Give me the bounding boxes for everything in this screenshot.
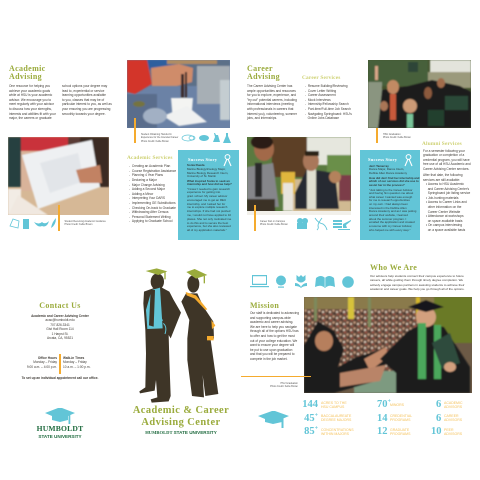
stat: 45+ majors: 45+ xyxy=(304,412,318,424)
text: career advising intro: The Career Advising Center has xyxy=(247,84,292,88)
list: alumni services: on a space available basis xyxy=(428,228,465,232)
list: career services: - Part-time/Full-time Job Search xyxy=(305,107,351,111)
text: office hours: 9:00 a.m. – 4:00 p.m. xyxy=(27,365,57,369)
text: quote: "Just talking to the Career Advisor xyxy=(369,188,412,192)
text: walk-in times xyxy=(63,356,90,369)
list: career services: - Mock Interviews xyxy=(305,98,331,102)
caption: lab photo: Photo Credit: Kellie Brown xyxy=(141,140,169,143)
text: quote: for me to research opportunities xyxy=(369,198,410,202)
stat: 144 acres xyxy=(298,399,348,412)
caption: lab photo: Student Obtaining Hands-On xyxy=(141,133,172,136)
stat: 85+ concentrations xyxy=(298,426,364,439)
text: alumni services intro: free use of all HSU Academic and xyxy=(423,162,471,166)
illustration: two graduates xyxy=(139,268,218,403)
stat: 6 academic advisors xyxy=(430,399,470,412)
stat: 6 career advisors xyxy=(430,412,470,425)
icon: ribbon xyxy=(404,154,412,166)
title: Academic & Career Advising Center: Advising Center xyxy=(141,417,221,428)
caption: graduation photo xyxy=(383,133,411,139)
text: question: assist her in the process? xyxy=(369,183,405,187)
list: academic services: - Major Change Advising xyxy=(129,183,165,187)
text: who we are description xyxy=(370,274,465,291)
text: student name and major: Jerri Tamerray xyxy=(369,164,389,168)
caption: mission photo: HSU Graduation xyxy=(280,382,298,385)
text: appointment note: To set up an individual appointment call our office. xyxy=(22,376,98,380)
text: quote: places. She not only motivated me xyxy=(187,217,231,221)
text: academic advising intro column 1 xyxy=(9,84,56,120)
text: quote: emailed the application and created xyxy=(369,220,415,224)
text: academic advising intro column 1: interests and abilities fit with your xyxy=(9,112,56,116)
text: mission statement: and supporting campus-wide xyxy=(250,316,291,320)
icons: academic items xyxy=(10,218,56,229)
stat: 10 peer advisors: ADVISORS xyxy=(444,432,462,436)
list: alumni services: Springboard job listing service xyxy=(428,191,470,195)
stat: 10 peer advisors: PEER xyxy=(444,428,454,432)
caption: career fair photo: Photo Credit: Kellie Brown xyxy=(260,223,288,226)
text: question: How did Jerri find her internship and xyxy=(369,176,419,180)
stat: 45+ majors: DEGREE MAJORS xyxy=(321,418,351,422)
text: contact details xyxy=(31,314,89,340)
text: career advising intro: with professionals in careers that xyxy=(247,107,293,111)
list: academic services: - Planning 4 Year Plans xyxy=(129,173,163,177)
heading: Academic Services: Academic Services xyxy=(127,154,173,160)
logo: Humboldt State University xyxy=(36,408,84,438)
stat: 45+ majors: BACCALAUREATE xyxy=(321,414,351,418)
caption: guidance photo: Photo Credit: Kellie Brown xyxy=(64,223,92,226)
list: academic services: - Declaring a Major xyxy=(129,178,157,182)
heading: Alumni Services: Alumni Services xyxy=(422,140,462,146)
heading: Career Advising: Advising xyxy=(247,72,280,81)
text: academic advising intro column 2 xyxy=(62,84,112,116)
man silhouette xyxy=(139,268,181,403)
stat: 6 career advisors: CAREER xyxy=(444,414,459,418)
stat: 85+ concentrations: 85+ xyxy=(304,426,318,437)
text: quote: interested in the Debbie Allen xyxy=(369,206,407,210)
text: who we are description: Our advisors help students connect their campus experience to future xyxy=(370,274,464,278)
text: alumni services intro: services are still available: xyxy=(423,178,460,182)
heading: Academic Advising: Academic xyxy=(9,64,46,72)
text: career advising intro: "try out" potential careers, including xyxy=(247,98,297,102)
stat: 6 academic advisors: 6 xyxy=(436,399,441,410)
text: who we are description: actively engage campus partners in assisting students to achieve their xyxy=(370,283,465,287)
list: career services: - Resume Building/Reviewing xyxy=(305,84,348,88)
list: alumni services: Career Center Website xyxy=(428,210,460,214)
list: academic services xyxy=(129,164,176,223)
text: quote: what career I wanted was enough xyxy=(369,195,412,199)
text: student name and major xyxy=(187,163,228,178)
icons: science xyxy=(182,133,231,143)
stat: 144 acres: HSU CAMPUS xyxy=(321,405,344,409)
text: question: internship and how did we help? xyxy=(187,182,232,186)
text: contact details: acac@humboldt.edu xyxy=(45,318,75,322)
stat: 144 acres: 144 xyxy=(302,399,318,410)
text: student name and major: Marine Biology Research Intern, xyxy=(187,171,228,175)
stat: 70+ minors: MINORS xyxy=(390,402,404,406)
panel: success story career xyxy=(360,150,420,240)
icons: campus items xyxy=(250,275,354,288)
text: academic advising intro column 2: school options your degree may xyxy=(62,84,107,88)
text: mission statement xyxy=(250,311,299,361)
caption: mission photo xyxy=(258,382,298,389)
heading: Academic Advising: Advising xyxy=(9,72,42,81)
list: alumni services xyxy=(426,182,470,232)
icon: graduation cap xyxy=(258,411,289,428)
text: contact details: 1 Harpst St. xyxy=(52,332,68,336)
text: quote: me, I would not have applied to 10 xyxy=(187,213,231,217)
text: quote xyxy=(187,186,232,232)
caption: lab photo: Experience for the Intended Career xyxy=(141,136,178,139)
text: mission statement: We are here to help you navigate xyxy=(250,325,297,329)
text: quote: to do this and to secure the best xyxy=(187,221,228,225)
heading: success story: Success Story xyxy=(368,157,397,162)
stat: 14 credential programs: CREDENTIAL xyxy=(390,414,412,418)
stat: 10 peer advisors: 10 xyxy=(431,426,442,437)
caption: graduation photo: Photo Credit: Kellie Brown xyxy=(383,136,411,139)
text: quote: all of my application materials." xyxy=(187,228,227,232)
text: quote: who helped me with every step." xyxy=(369,228,411,232)
stat: 6 academic advisors: ADVISORS xyxy=(444,405,462,409)
list: alumni services: • Access to Career Links and xyxy=(426,200,467,204)
text: mission statement: through all of the options HSU has xyxy=(250,329,299,333)
list: alumni services: • On campus interviewing xyxy=(426,223,462,227)
text: quote: encouraged me to get an REU xyxy=(187,198,226,202)
text: who we are description: academic and career goals. We help you go through all of the options. xyxy=(370,287,464,291)
text: alumni services intro: For a semester following your xyxy=(423,148,465,152)
text: Humboldt State University line: HUMBOLDT STATE UNIVERSITY xyxy=(145,430,217,435)
heading: Career Advising: Career xyxy=(247,64,273,72)
orange bar: mission photo xyxy=(241,376,311,377)
text: academic advising intro column 2: your ensuring you are progressing xyxy=(62,107,110,111)
text: quote: a resume with my Career Advisor, xyxy=(369,224,412,228)
list: academic services: - Course Registration Assistance xyxy=(129,169,176,173)
panel: success story academic xyxy=(178,150,239,240)
text: quote: on my own. I had always been xyxy=(369,202,408,206)
text: student name and major: Marine Biology/Zoology Major, xyxy=(187,167,226,171)
stat: 10 peer advisors xyxy=(430,426,470,439)
list: alumni services: and Career Advising Center's xyxy=(428,187,469,191)
text: quote: Dance Academy and as I was poking xyxy=(369,209,416,213)
text: academic advising intro column 1: meet regularly with your advisor xyxy=(9,102,54,106)
text: quote: experience for getting into xyxy=(187,190,220,194)
text: quote: me to explore multiple research xyxy=(187,205,227,209)
text: academic advising intro column 1: major, the careers or graduate xyxy=(9,116,52,120)
stat: 85+ concentrations: CONCENTRATIONS xyxy=(321,428,354,432)
text: career advising intro: jobs, and internships. xyxy=(247,116,277,120)
text: walk-in times: Monday – Friday xyxy=(63,360,87,364)
list: academic services: - Interpreting Your DARS xyxy=(129,196,165,200)
text: mission statement: academic and career advising. xyxy=(250,320,293,324)
text: academic advising intro column 2: lead to, experiential or service xyxy=(62,89,104,93)
caption: lab photo xyxy=(141,133,178,143)
list: career services xyxy=(305,84,352,120)
text: academic advising intro column 1: while at HSU is your academic xyxy=(9,93,52,97)
stat: 70+ minors: 70+ xyxy=(377,398,391,410)
text: student name and major xyxy=(369,164,407,175)
text: walk-in times: 10 a.m. – 1:00 p.m. xyxy=(63,365,90,369)
list: career services: Online Jobs Database xyxy=(308,116,339,120)
text: alumni services intro: Career Advising Center services. xyxy=(423,167,469,171)
stat: 45+ majors xyxy=(298,412,358,425)
list: alumni services: on space available basis xyxy=(428,219,463,223)
caption: guidance photo xyxy=(64,220,106,226)
heading: Career Services: Career Services xyxy=(302,75,341,81)
text: academic advising intro column 1: advisor. We encourage you to xyxy=(9,98,51,102)
text: career advising intro: interest you), volunteering, summer xyxy=(247,112,297,116)
stat: 70+ minors xyxy=(376,399,416,412)
orange bar: graduation photo xyxy=(376,128,378,143)
text: student name and major: Sonia Rueda xyxy=(187,163,205,167)
text: quote: and having him question me about xyxy=(369,191,413,195)
text: quote: internships. If she had not pushed xyxy=(187,209,230,213)
text: career advising intro: for you to explore, experience, and xyxy=(247,93,296,97)
text: question xyxy=(187,178,232,186)
icons: career items xyxy=(297,218,351,230)
text: office hours: Office Hours xyxy=(38,356,57,360)
text: academic advising intro column 2: to you, classes that may be of xyxy=(62,98,104,102)
text: who we are description: careers, all while guiding them through timely degree completion. We xyxy=(370,278,463,282)
text: academic advising intro column 1: to discuss how your strengths, xyxy=(9,107,52,111)
text: academic advising intro column 2: learning opportunities available xyxy=(62,93,106,97)
stat: 6 academic advisors: ACADEMIC xyxy=(444,400,462,404)
heading: Academic Advising xyxy=(9,64,46,81)
caption: mission photo: Photo Credit: Kellie Brown xyxy=(270,385,298,388)
heading: success story: Success Story xyxy=(188,157,217,162)
stat: 14 credential programs: 14 xyxy=(377,413,388,424)
text: Humboldt wordmark: HUMBOLDT xyxy=(37,424,83,433)
text: student name and major: University of St. Martin xyxy=(187,174,216,178)
icon: ribbon xyxy=(224,154,232,166)
list: academic services: - Withdrawing After Census xyxy=(129,210,169,214)
caption: guidance photo: Student Receiving Academic Guidance xyxy=(64,220,106,223)
title: Academic & Career Advising Center: Academic & Career xyxy=(133,405,229,416)
text: quote xyxy=(369,188,416,232)
stat: 12 graduate programs xyxy=(376,426,416,439)
text: academic advising intro column 1: One resource for helping you xyxy=(9,84,50,88)
text: quote: "I knew I needed to gain research xyxy=(187,186,230,190)
title: Academic & Career Advising Center xyxy=(133,405,229,428)
stat: 144 acres: ACRES TO THE xyxy=(321,400,347,404)
text: office hours: Monday – Friday xyxy=(33,360,57,364)
stat: 12 graduate programs: 12 xyxy=(377,426,388,437)
stat: 14 credential programs xyxy=(376,412,416,425)
orange bar: guidance photo xyxy=(58,205,60,231)
stat: 6 career advisors: ADVISORS xyxy=(444,418,462,422)
photo: career fair xyxy=(247,137,351,215)
text: student name and major: Debbie Allen Dance Academy xyxy=(369,171,407,175)
text: academic advising intro column 1: achieve your academic goals xyxy=(9,89,50,93)
text: career advising intro: ample opportunities and resources xyxy=(247,89,296,93)
text: State University: STATE UNIVERSITY xyxy=(38,434,82,438)
text: contact details: 707.826.3341 xyxy=(50,323,70,327)
orange bar: career fair photo xyxy=(254,205,256,231)
text: alumni services intro: graduation or completion of a xyxy=(423,153,464,157)
caption: career fair photo xyxy=(260,220,288,226)
list: academic services: - Creating an Academic Plan xyxy=(129,164,170,168)
photo: lab experiment xyxy=(127,60,230,128)
list: academic services: - Implementing GE Substitutions xyxy=(129,201,176,205)
list: alumni services: • Attendance at workshops xyxy=(426,214,464,218)
woman silhouette xyxy=(181,269,218,397)
text: quote: about the summer program. I xyxy=(369,217,406,221)
list: academic services: - Adding a Second Major xyxy=(129,187,165,191)
text: quote: internship, and I asked her for xyxy=(187,202,225,206)
stat: 6 career advisors: 6 xyxy=(436,413,441,424)
text: academic advising intro column 2: smoothly towards your degree. xyxy=(62,112,106,116)
text: walk-in times: Walk-in Times xyxy=(63,356,84,360)
text: question: What inspired Sonia to seek an xyxy=(187,178,230,182)
text: contact details: Academic and Career Advising Center xyxy=(31,314,89,318)
text: mission statement: to offer and how to get the most xyxy=(250,334,295,338)
list: career services: - Cover Letter Writing xyxy=(305,89,336,93)
text: mission statement: out of your college education. We xyxy=(250,339,297,343)
list: alumni services: • Access to HSU Academic xyxy=(426,182,464,186)
list: career services: - Career Assessment xyxy=(305,93,336,97)
orange bar: hours divider xyxy=(59,354,61,374)
text: quote: around their website, I learned xyxy=(369,213,408,217)
text: career advising intro xyxy=(246,84,297,120)
list: academic services: - Applying to Graduate School xyxy=(129,219,172,223)
stat: 12 graduate programs: GRADUATE xyxy=(390,428,409,432)
text: mission statement: Our staff is dedicated to advancing xyxy=(250,311,299,315)
orange bar: lab photo xyxy=(134,118,136,143)
text: academic advising intro column 2: particular interest to you, as well as xyxy=(62,102,112,106)
heading: Career Advising xyxy=(247,64,280,81)
text: quote: experience, but she also reviewed xyxy=(187,224,231,228)
text: question: which of our services did she use to xyxy=(369,179,419,183)
list: alumni services: • Job-hunting materials xyxy=(426,196,458,200)
list: academic services: - Checking On-track to Graduate xyxy=(129,206,176,210)
list: academic services: - Adding a Minor xyxy=(129,192,153,196)
stat: 12 graduate programs: PROGRAMS xyxy=(390,432,410,436)
heading: Contact Us: Contact Us xyxy=(39,301,81,310)
photo: HSU graduation handshake xyxy=(304,297,472,393)
list: career services: - Internship/Fellowship Search xyxy=(305,102,349,106)
text: contact details: Arcata, CA, 95521 xyxy=(47,336,73,340)
icon: graduation cap xyxy=(45,408,75,424)
caption: graduation photo: HSU Graduation xyxy=(383,133,401,136)
list: career services: - Navigating Springboard: HSU's xyxy=(305,112,352,116)
list: academic services: - Personal Statement Writing xyxy=(129,215,171,219)
list: alumni services: other information on the xyxy=(428,205,461,209)
stat: 14 credential programs: PROGRAMS xyxy=(390,418,410,422)
heading: Mission: Mission xyxy=(250,301,279,310)
text: contact details: Gist Hall Room 114 xyxy=(46,327,74,331)
text: mission statement: be put to use upon graduation xyxy=(250,348,292,352)
text: alumni services intro: After that date, the following xyxy=(423,173,463,177)
text: mission statement: want to ensure your degree will xyxy=(250,343,294,347)
photo: HSU graduation group xyxy=(368,60,471,128)
text: mission statement: compete in the job market. xyxy=(250,357,288,361)
text: student name and major: Dance Major, Dance Intern, xyxy=(369,167,404,171)
text: office hours xyxy=(27,356,57,369)
stat: 85+ concentrations: WITHIN MAJORS xyxy=(321,432,349,436)
heading: Who We Are: Who We Are xyxy=(370,262,417,272)
caption: career fair photo: Career Fair on Campus xyxy=(260,220,285,223)
text: quote: grad. school. My career advisor xyxy=(187,194,227,198)
text: question xyxy=(369,176,420,187)
text: alumni services intro: credential program, you will have xyxy=(423,158,470,162)
text: career advising intro: informational interviews (meeting xyxy=(247,102,294,106)
text: mission statement: and that you will be prepared to xyxy=(250,352,294,356)
text: alumni services intro xyxy=(423,148,471,182)
photo: student reviewing guidance xyxy=(8,137,109,215)
